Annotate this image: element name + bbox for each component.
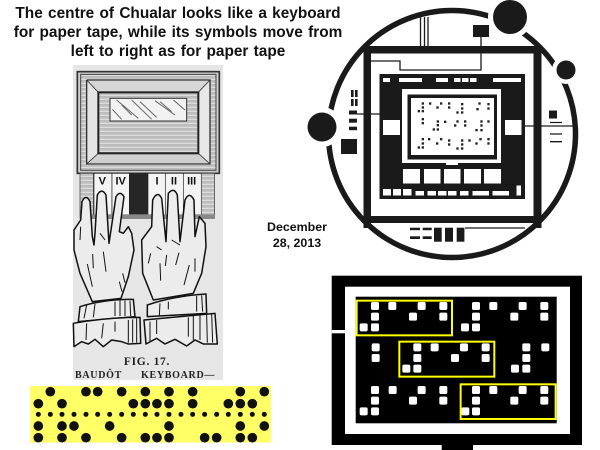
left hand bbox=[74, 191, 134, 302]
yellow highlight boxes bbox=[357, 301, 556, 419]
caption: Fig. 17: FIG. 17. bbox=[124, 356, 170, 368]
title bbox=[14, 5, 342, 60]
piano-style keys: V bbox=[99, 176, 107, 188]
right cuff bbox=[147, 294, 207, 317]
small square top bbox=[473, 25, 489, 37]
date: December bbox=[267, 220, 327, 234]
tape row 2 bbox=[33, 399, 257, 408]
title: left to right as for paper tape bbox=[71, 43, 285, 60]
tape row 1 bbox=[45, 387, 269, 396]
satellite circle left bbox=[308, 112, 336, 142]
monitor stem bbox=[442, 445, 473, 450]
piano-style keys bbox=[80, 173, 215, 219]
marks below frame bbox=[410, 228, 464, 242]
left side marks bbox=[341, 90, 358, 154]
top key strip bbox=[383, 78, 521, 82]
symbol row 2 bbox=[372, 343, 549, 373]
date bbox=[267, 220, 327, 250]
tape row 4 bbox=[33, 421, 269, 431]
screen symbols bbox=[418, 102, 490, 150]
right side mark bbox=[549, 110, 557, 118]
outer ring bbox=[328, 10, 576, 258]
monitor frame bbox=[332, 276, 582, 445]
satellite circle top bbox=[493, 0, 527, 34]
piano-style keys: III bbox=[187, 176, 196, 188]
date: 28, 2013 bbox=[273, 236, 321, 250]
piano-style keys: I bbox=[155, 176, 159, 188]
hands bbox=[73, 190, 217, 347]
tape row 5 bbox=[33, 433, 257, 442]
caption: Baudot keyboard: KEYBOARD— bbox=[141, 370, 215, 381]
piano-style keys: II bbox=[171, 176, 177, 188]
right hand bbox=[142, 190, 206, 300]
panel: paper tape bbox=[30, 386, 271, 442]
title: The centre of Chualar looks like a keyboard bbox=[15, 5, 341, 22]
left cuff bbox=[78, 299, 135, 322]
panel: enlarged screen with highlighted symbols bbox=[332, 276, 582, 450]
piano-style keys: IV bbox=[115, 176, 127, 188]
sprocket holes bbox=[36, 412, 267, 417]
satellite circle right bbox=[556, 60, 576, 80]
panel: Chualar circular diagram bbox=[302, 0, 580, 258]
side keys bbox=[383, 120, 522, 135]
keyboard panel bbox=[380, 74, 525, 199]
bottom key strip bbox=[383, 186, 521, 196]
five large keys bbox=[403, 169, 501, 184]
symbol row 3 bbox=[360, 386, 548, 415]
panel: Baudot keyboard engraving bbox=[73, 65, 223, 381]
title: for paper tape, while its symbols move from bbox=[14, 24, 342, 41]
central frame bbox=[364, 46, 542, 228]
caption: Baudot keyboard: BAUDÔT bbox=[75, 368, 122, 381]
symbol row 1 bbox=[360, 302, 548, 331]
thin connector lines bbox=[357, 17, 574, 228]
screen bbox=[402, 89, 501, 163]
keyboard box frame bbox=[77, 72, 219, 173]
